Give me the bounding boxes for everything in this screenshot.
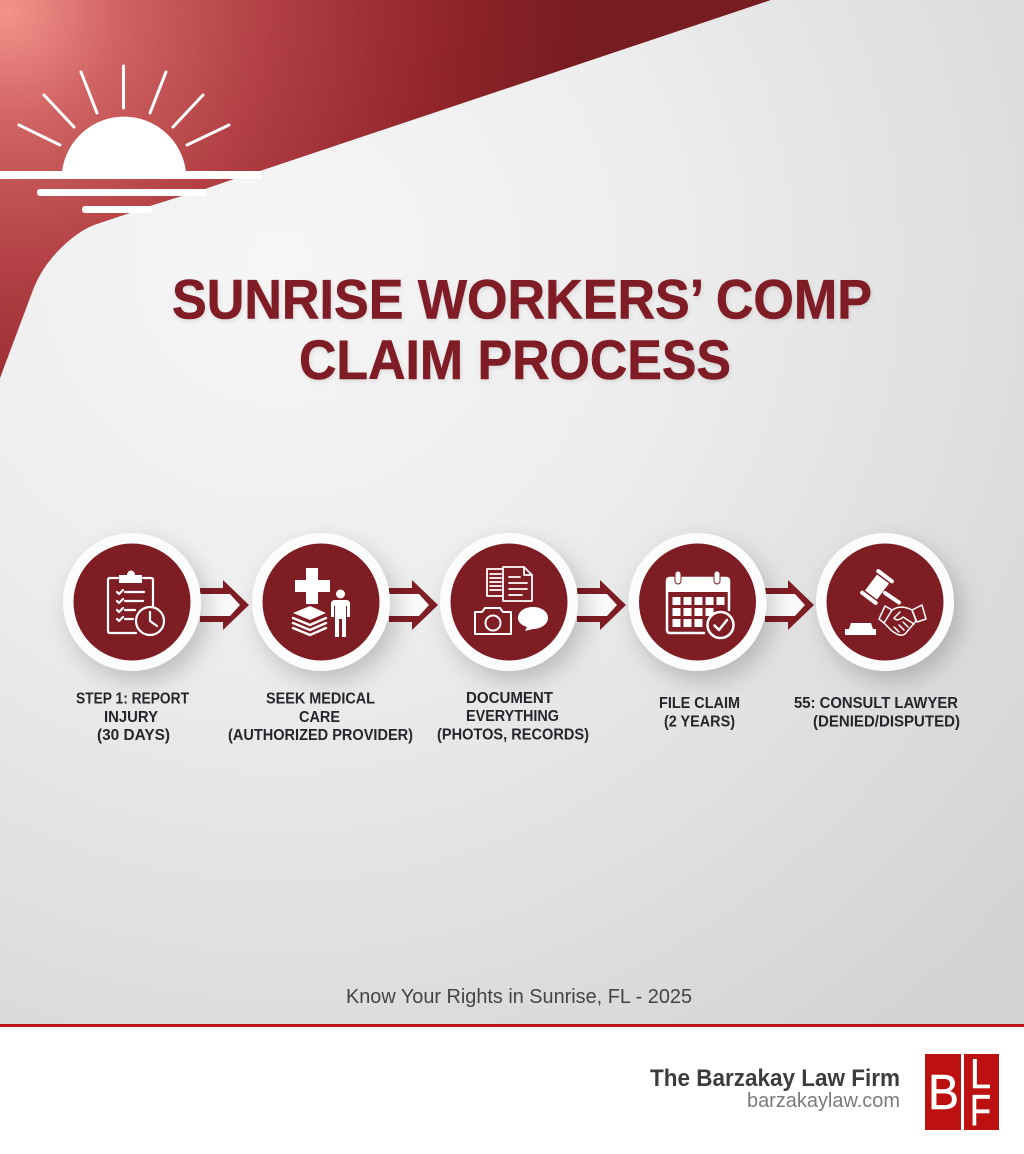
circle badge [252, 533, 390, 671]
circle badge [63, 533, 201, 671]
label: STEP 1: REPORT [76, 690, 189, 708]
label: 55: CONSULT LAWYER [794, 695, 958, 712]
label: INJURY [104, 709, 159, 726]
arrow 4 [765, 580, 814, 630]
label [437, 690, 589, 744]
step 4 [628, 533, 766, 730]
icon: clipboard with clock [108, 570, 164, 635]
sun [62, 117, 186, 172]
label: (AUTHORIZED PROVIDER) [228, 727, 413, 744]
circle badge [816, 533, 954, 671]
icon: documents, camera and speech bubble [475, 567, 548, 634]
label: (PHOTOS, RECORDS) [437, 726, 589, 744]
title: CLAIM PROCESS [299, 328, 731, 391]
firm name [650, 1065, 900, 1112]
label: SEEK MEDICAL [266, 690, 375, 708]
firm name: The Barzakay Law Firm [650, 1065, 900, 1092]
label: CARE [299, 709, 340, 726]
label [659, 695, 740, 730]
label [794, 695, 960, 730]
icon: gavel and handshake [845, 568, 926, 635]
label [228, 690, 413, 744]
tagline: Know Your Rights in Sunrise, FL - 2025 [346, 986, 692, 1008]
icon: calendar with check mark [667, 571, 734, 638]
logo: BLF: B [928, 1066, 959, 1120]
label: (30 DAYS) [97, 727, 170, 744]
logo: BLF: F [970, 1086, 991, 1135]
label: (DENIED/DISPUTED) [813, 714, 960, 730]
sun rays [19, 66, 229, 145]
label: FILE CLAIM [659, 695, 740, 712]
label: DOCUMENT [466, 690, 554, 707]
title [172, 268, 872, 391]
header red swoosh [0, 0, 771, 378]
circle badge [440, 533, 578, 671]
icon: medical cross, records and person [293, 568, 350, 637]
arrow 3 [577, 580, 626, 630]
label: (2 YEARS) [664, 714, 735, 730]
circle badge [628, 533, 766, 671]
label [76, 690, 189, 744]
horizon lines [0, 171, 262, 213]
logo: BLF [925, 1050, 999, 1135]
step 2 [228, 533, 413, 744]
step 3 [437, 533, 589, 744]
footer band [0, 1024, 1024, 1154]
label: EVERYTHING [466, 708, 559, 725]
sunrise logo [0, 66, 262, 213]
title: SUNRISE WORKERS’ COMP [172, 268, 872, 330]
arrow 1 [200, 580, 249, 630]
logo: BLF: L [970, 1050, 991, 1097]
firm name: barzakaylaw.com [747, 1090, 900, 1112]
arrow 2 [389, 580, 438, 630]
step 5 [794, 533, 960, 730]
step 1 [63, 533, 201, 744]
